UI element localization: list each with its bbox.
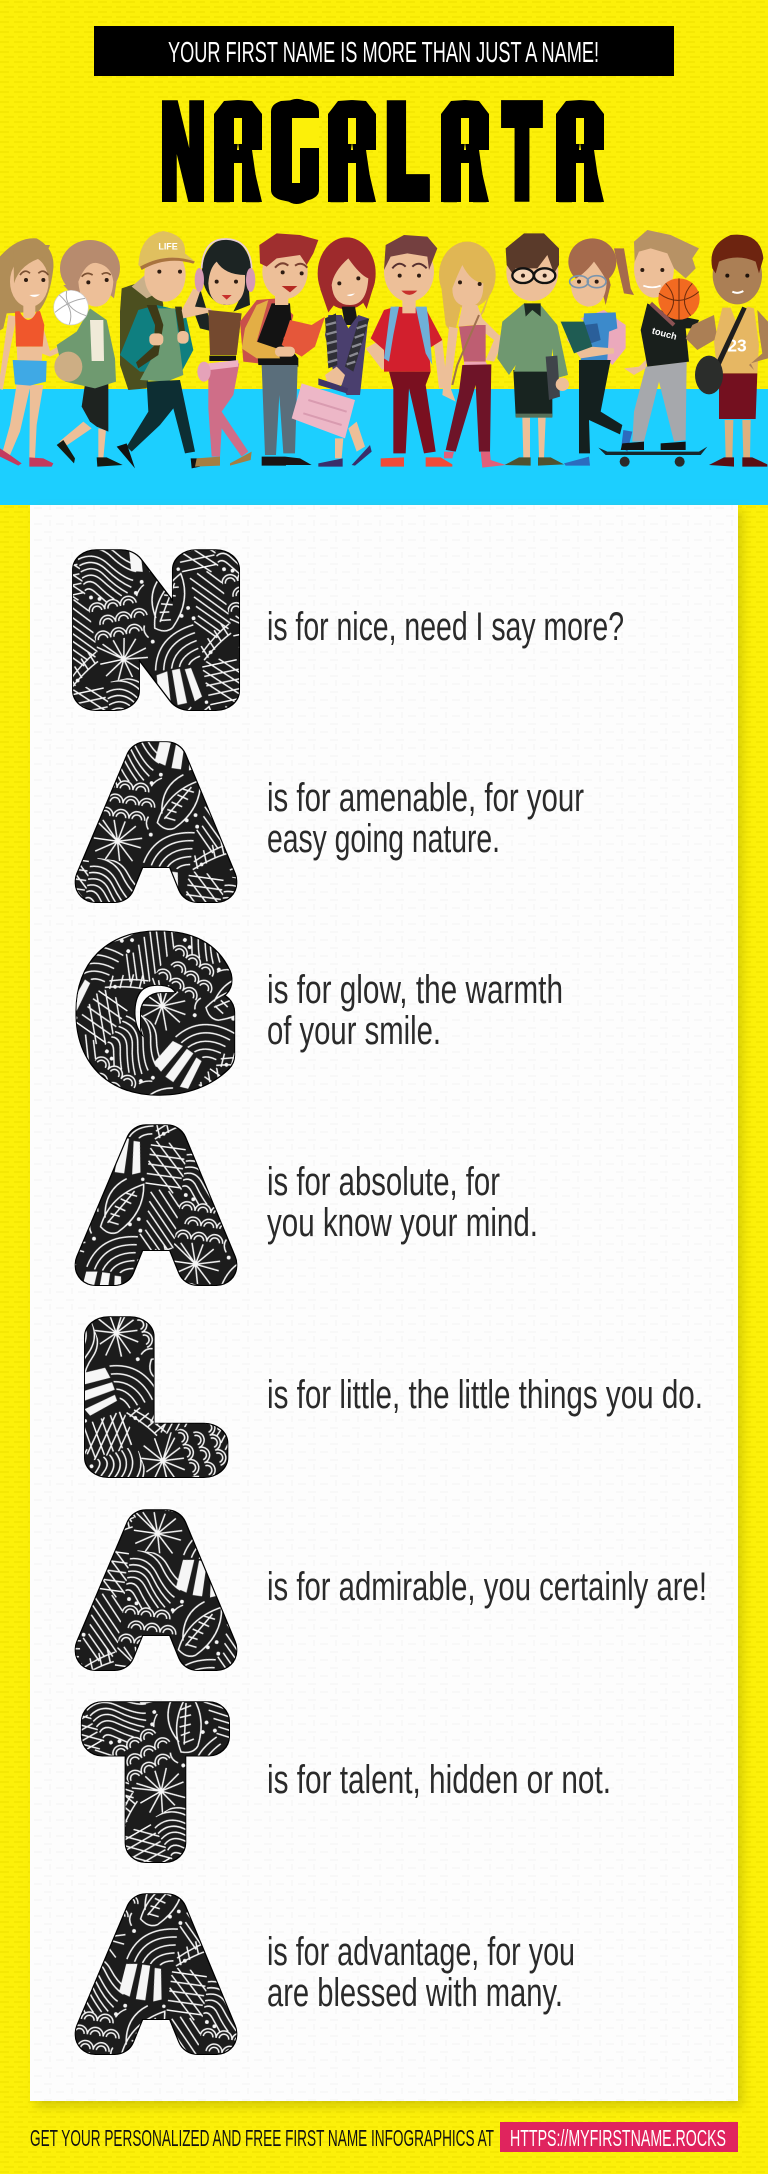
text: fourth A lines: are blessed with many.: [267, 1971, 563, 2015]
title: N: [159, 80, 207, 227]
letter N: N: [80, 532, 232, 727]
person 5: boy with backpack and book: [240, 233, 325, 466]
text: second A lines: [267, 1160, 538, 1245]
text: first A lines: [267, 776, 584, 861]
person 8: blonde girl: [439, 242, 506, 468]
white content panel: [30, 505, 743, 2107]
person 10: girl with ponytail and book: [561, 238, 634, 466]
person 11: boy on skateboard with basketball: [598, 230, 707, 467]
letter A: A: [96, 1107, 216, 1302]
title: [159, 80, 604, 227]
title: A: [446, 80, 484, 227]
person 4: girl with headphones: [182, 238, 255, 467]
text: fourth A lines: is for advantage, for you: [267, 1930, 575, 1974]
title: L: [383, 80, 429, 227]
text: fourth A lines: [267, 1930, 575, 2015]
text: first A lines: easy going nature.: [267, 817, 500, 861]
text: N line: is for nice, need I say more?: [267, 605, 624, 649]
person 12: boy in yellow tank with bag: [686, 235, 768, 467]
title: G: [273, 80, 316, 227]
header banner: [94, 26, 674, 76]
blue floor band: [0, 389, 768, 505]
text: T line: is for talent, hidden or not.: [267, 1758, 611, 1802]
letter A: A: [96, 1492, 216, 1687]
text: second A lines: you know your mind.: [267, 1201, 538, 1245]
text: G lines: [267, 968, 563, 1053]
person 9: boy with glasses and laptop: [497, 233, 569, 466]
person 3: hiker with cap and backpack: [117, 231, 200, 468]
person 1: girl in orange top: [0, 238, 83, 467]
letter T: T: [99, 1684, 212, 1879]
person 2: girl with volleyball: [54, 240, 123, 467]
letter L: L: [92, 1299, 210, 1494]
title: A: [219, 80, 257, 227]
letter A: A: [96, 724, 216, 919]
text: G lines: of your smile.: [267, 1009, 441, 1053]
person 3: hiker with cap and backpack: LIFE: [158, 242, 178, 252]
person 6: girl with pink bag: [292, 237, 376, 467]
patterned letter illustrations: [80, 532, 232, 2071]
title: T: [503, 80, 541, 227]
text: A: [561, 80, 599, 227]
person 7: boy in red shirt: [366, 235, 452, 467]
letter A: A: [96, 1876, 216, 2071]
illustration: students, right half: [366, 230, 768, 468]
title: A: [333, 80, 371, 227]
illustration: students, left half: [0, 231, 376, 468]
text: second A lines: is for absolute, for: [267, 1160, 500, 1204]
text: G lines: is for glow, the warmth: [267, 968, 563, 1012]
person 11: boy on skateboard with basketball: touch: [651, 326, 678, 342]
person 12: boy in yellow tank with bag: 23: [727, 336, 747, 356]
text: first A lines: is for amenable, for your: [267, 776, 584, 820]
letter G: G: [88, 915, 227, 1110]
